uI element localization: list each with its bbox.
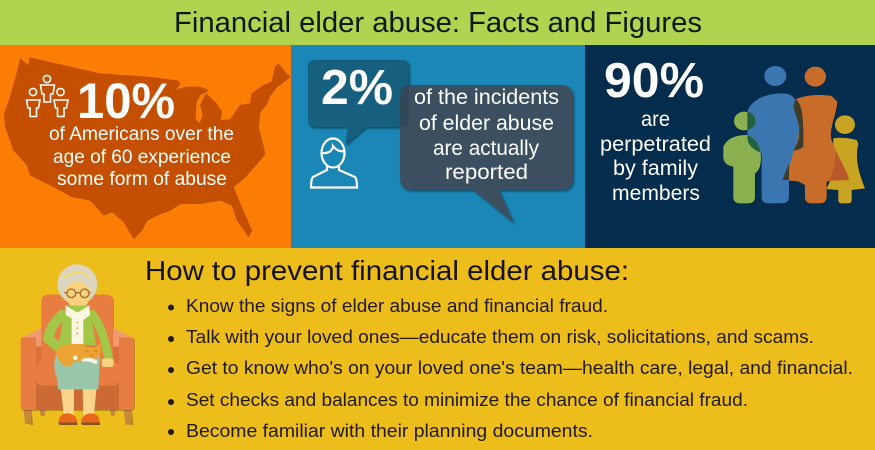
text: incidents reported: reported [445,161,528,184]
statistic: 90%: 90% [604,54,704,108]
chair [21,295,134,410]
text: perpetrated by family: members [612,182,700,205]
speech bubble: incidents [400,85,573,223]
icon: map of the USA [4,57,290,238]
icon: family [723,66,865,203]
statistic: 2%: 2% [321,61,393,115]
skirt [54,354,100,389]
hair [58,265,97,304]
text: incidents reported [414,86,559,184]
panel: 2 percent [291,45,585,248]
text: perpetrated by family: are [641,108,670,131]
text: Americans over 60: age of 60 experience [53,147,231,168]
icon: three people [26,75,68,116]
text: incidents reported: of elder abuse [419,112,554,135]
heading: How to prevent financial elder abuse: [145,255,629,286]
legs [60,387,97,415]
headband [63,272,91,278]
title banner [0,0,875,45]
list: prevention tips: Become familiar with their planning documents. [186,420,593,441]
buttons [76,322,78,335]
list: prevention tips: Talk with your loved ones—educate them on risk, solicitations, and scams. [186,326,814,347]
text: incidents reported: are actually [433,137,539,160]
title: Financial elder abuse: Facts and Figures [174,7,702,39]
cat [56,343,101,367]
earrings [62,298,94,300]
hand [102,358,114,367]
text: incidents reported: of the incidents [414,86,559,109]
panel: 90 percent [585,45,875,248]
statistic: 10%: 10% [77,73,175,129]
illustration: grandmother with cat in armchair [21,265,134,425]
text: Americans over 60 [49,124,234,190]
chair legs [23,407,133,425]
list: prevention tips: Set checks and balances to minimize the chance of financial fraud. [186,389,748,410]
list: prevention tips: Know the signs of elder abuse and financial fraud. [186,295,608,316]
panel: 10 percent [0,45,291,248]
text: perpetrated by family [600,108,711,205]
blouse [66,305,90,344]
shoes [58,413,100,422]
cardigan [48,306,109,359]
text: Americans over 60: of Americans over the [49,124,234,145]
text: Americans over 60: some form of abuse [57,169,227,190]
list: prevention tips: Get to know who's on your loved one's team—health care, legal, and financial. [186,357,853,378]
text: perpetrated by family: perpetrated [600,133,711,156]
text: perpetrated by family: by family [613,157,699,180]
speech bubble: 2% [308,60,409,145]
panel: how to prevent [0,248,875,450]
list: prevention tips [168,295,853,441]
face [65,281,91,312]
bubble overlap [400,85,409,127]
glasses [64,289,91,298]
icon: person [311,138,357,188]
